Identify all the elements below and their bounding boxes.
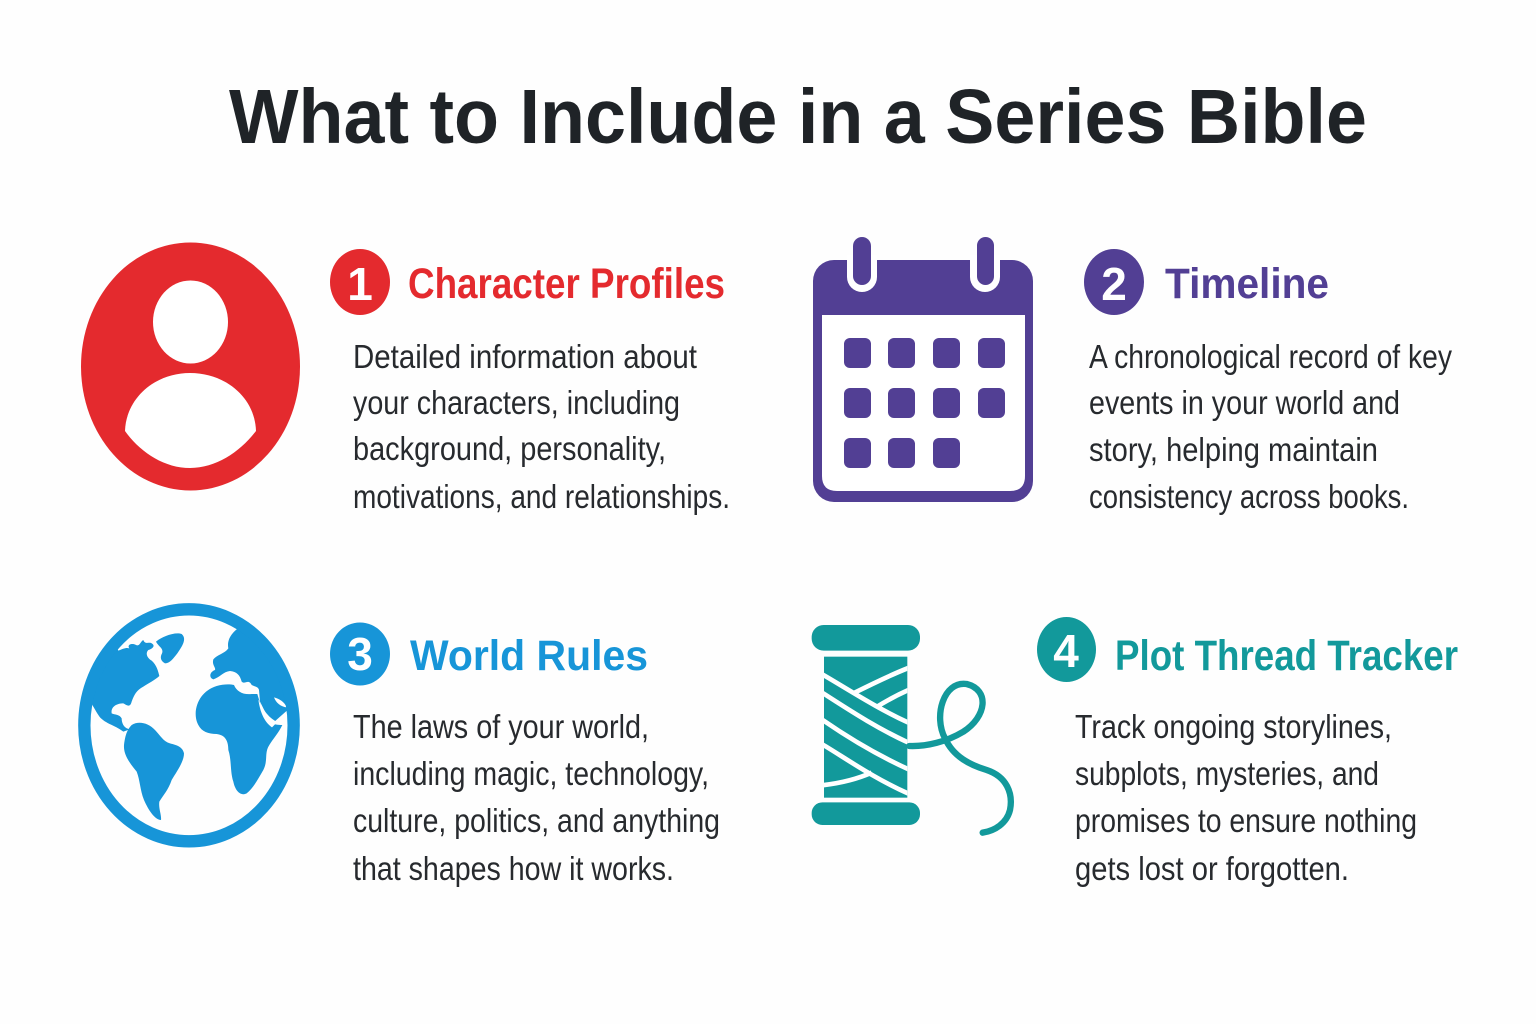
number badge 2: [1084, 249, 1144, 315]
number badge 3: [330, 622, 390, 686]
text block: world rules description: including magic, technology,: [353, 755, 709, 792]
text block: character profiles description: [353, 338, 730, 515]
number badge 3: 3: [347, 628, 373, 680]
heading: world rules: World Rules: [410, 632, 648, 680]
text block: world rules description: culture, politics, and anything: [353, 802, 720, 839]
panel: world rules: [80, 609, 720, 887]
panel: character profiles: [81, 242, 730, 515]
heading: timeline: Timeline: [1165, 260, 1329, 308]
text block: character profiles description: background, personality,: [353, 430, 666, 467]
panel: plot thread tracker: [812, 617, 1458, 887]
text block: timeline description: A chronological record of key: [1089, 338, 1452, 375]
text block: world rules description: that shapes how it works.: [353, 850, 674, 887]
number badge 4: [1037, 617, 1096, 682]
number badge 4: 4: [1053, 625, 1079, 677]
text block: plot thread tracker description: subplots, mysteries, and: [1075, 755, 1379, 792]
text block: timeline description: events in your world and: [1089, 384, 1400, 421]
heading: plot thread tracker: Plot Thread Tracker: [1115, 632, 1458, 680]
title: What to Include in a Series Bible: [229, 74, 1367, 160]
number badge 1: [330, 249, 390, 315]
text block: plot thread tracker description: gets lost or forgotten.: [1075, 850, 1349, 887]
number badge 2: 2: [1101, 258, 1127, 310]
heading: character profiles: Character Profiles: [408, 260, 725, 308]
text block: plot thread tracker description: promises to ensure nothing: [1075, 802, 1417, 839]
text block: character profiles description: Detailed information about: [353, 338, 697, 375]
text block: world rules description: [353, 708, 720, 887]
icon: calendar: [813, 237, 1033, 502]
text block: world rules description: The laws of your world,: [353, 708, 649, 745]
text block: plot thread tracker description: [1075, 708, 1417, 887]
text block: character profiles description: motivations, and relationships.: [353, 478, 730, 515]
text block: plot thread tracker description: Track ongoing storylines,: [1075, 708, 1392, 745]
text block: timeline description: consistency across books.: [1089, 478, 1409, 515]
number badge 1: 1: [347, 258, 373, 310]
text block: character profiles description: your characters, including: [353, 384, 680, 421]
text block: timeline description: [1089, 338, 1452, 515]
panel: timeline: [813, 237, 1452, 515]
icon: globe: [80, 609, 313, 841]
icon: thread spool: [812, 625, 1011, 833]
text block: timeline description: story, helping maintain: [1089, 431, 1378, 468]
icon: person: [81, 242, 300, 490]
infographic canvas: [78, 87, 1458, 887]
